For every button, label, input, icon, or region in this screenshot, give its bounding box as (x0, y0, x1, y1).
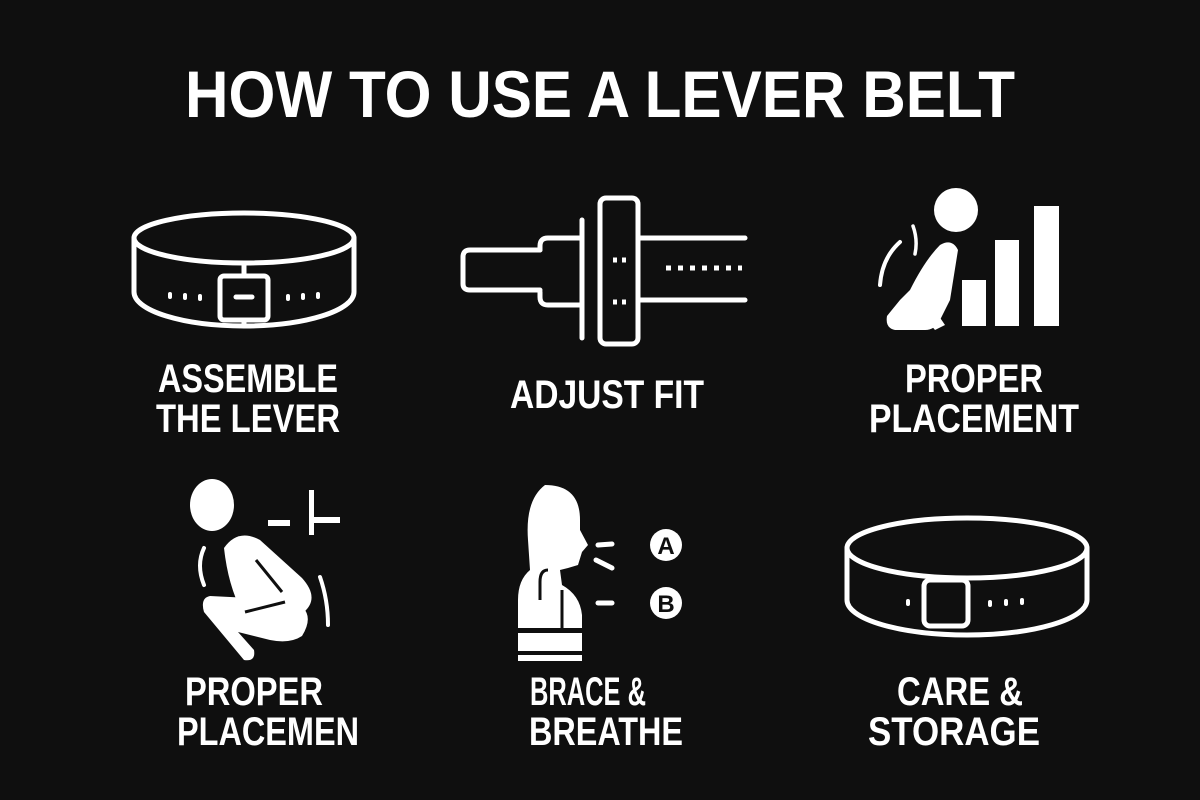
label: care and storage (868, 670, 1040, 754)
label: brace and breathe: BRACE & (530, 670, 646, 714)
label: proper placement: PROPER (905, 357, 1043, 401)
icon: adjust fit (463, 198, 745, 344)
icon: brace and breathe: B (657, 591, 675, 618)
label: proper placemen: PLACEMEN (177, 710, 359, 754)
icon: squat figure (190, 479, 340, 660)
icon: kneeling with bars (880, 188, 1059, 330)
label: assemble the lever (156, 357, 340, 441)
label: assemble the lever: ASSEMBLE (158, 357, 338, 401)
label: care and storage: STORAGE (868, 710, 1040, 754)
label: proper placement: PLACEMENT (869, 397, 1079, 441)
icon: belt storage (847, 518, 1087, 635)
label: brace and breathe (529, 670, 683, 754)
label: care and storage: CARE & (897, 670, 1023, 714)
title: HOW TO USE A LEVER BELT (185, 57, 1015, 131)
label: assemble the lever: THE LEVER (156, 397, 340, 441)
label: brace and breathe: BREATHE (529, 710, 683, 754)
label: adjust fit: ADJUST FIT (510, 373, 704, 417)
icon: brace and breathe (518, 485, 682, 661)
label: proper placement (869, 357, 1079, 441)
icon: belt assemble (134, 213, 354, 326)
label: proper placemen (177, 670, 359, 754)
label: proper placemen: PROPER (185, 670, 323, 714)
icon: brace and breathe: A (657, 533, 675, 560)
